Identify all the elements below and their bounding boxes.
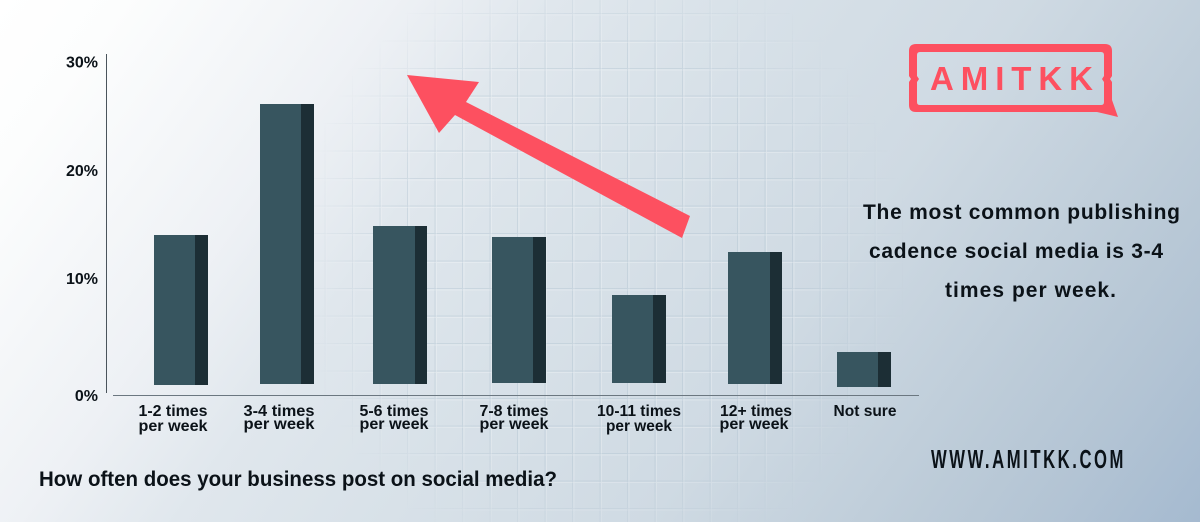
callout text xyxy=(863,201,1180,302)
label: 3-4 times per week: per week xyxy=(244,416,315,433)
bar: 12+ times per week xyxy=(728,252,782,384)
logo wordmark: AMITKK xyxy=(930,60,1093,97)
callout text: cadence social media is 3-4 xyxy=(869,240,1163,263)
arrow xyxy=(407,75,690,238)
x axis labels xyxy=(138,403,897,435)
y axis label 20%: 20% xyxy=(66,163,98,180)
label: 7-8 times per week xyxy=(480,403,549,433)
callout text: The most common publishing xyxy=(863,201,1180,224)
bar: Not sure xyxy=(837,352,891,387)
label: 12+ times per week xyxy=(720,403,792,433)
label: 10-11 times per week xyxy=(597,403,681,435)
chart caption: How often does your business post on social media? xyxy=(39,468,557,491)
label: 5-6 times per week: 5-6 times xyxy=(360,403,429,420)
label: 1-2 times per week xyxy=(138,403,208,435)
y axis label 0%: 0% xyxy=(75,388,98,405)
y axis label 30%: 30% xyxy=(66,54,98,72)
bar chart xyxy=(154,104,891,387)
label: 12+ times per week: per week xyxy=(720,416,789,433)
label: 7-8 times per week: per week xyxy=(480,416,549,433)
y axis label 10%: 10% xyxy=(66,271,98,288)
callout text: times per week. xyxy=(945,279,1116,302)
label: 10-11 times per week: per week xyxy=(606,418,672,435)
logo xyxy=(909,44,1118,117)
label: Not sure: Not sure xyxy=(834,403,897,420)
label: 3-4 times per week xyxy=(244,403,315,433)
x axis xyxy=(113,394,919,396)
label: 12+ times per week: 12+ times xyxy=(720,403,792,420)
bar: 1-2 times per week xyxy=(154,235,208,385)
logo speech bubble frame xyxy=(909,44,1118,117)
label: 5-6 times per week xyxy=(360,403,429,433)
label: 1-2 times per week: 1-2 times xyxy=(138,403,208,420)
y axis xyxy=(66,54,106,405)
label: 1-2 times per week: per week xyxy=(138,418,208,435)
bar: 7-8 times per week xyxy=(492,237,546,383)
bar: 10-11 times per week xyxy=(612,295,666,383)
label: 5-6 times per week: per week xyxy=(360,416,429,433)
bar: 3-4 times per week xyxy=(260,104,314,384)
bar: 5-6 times per week xyxy=(373,226,427,384)
label: 7-8 times per week: 7-8 times xyxy=(480,403,549,420)
label: 3-4 times per week: 3-4 times xyxy=(244,403,315,420)
label: 10-11 times per week: 10-11 times xyxy=(597,403,681,420)
